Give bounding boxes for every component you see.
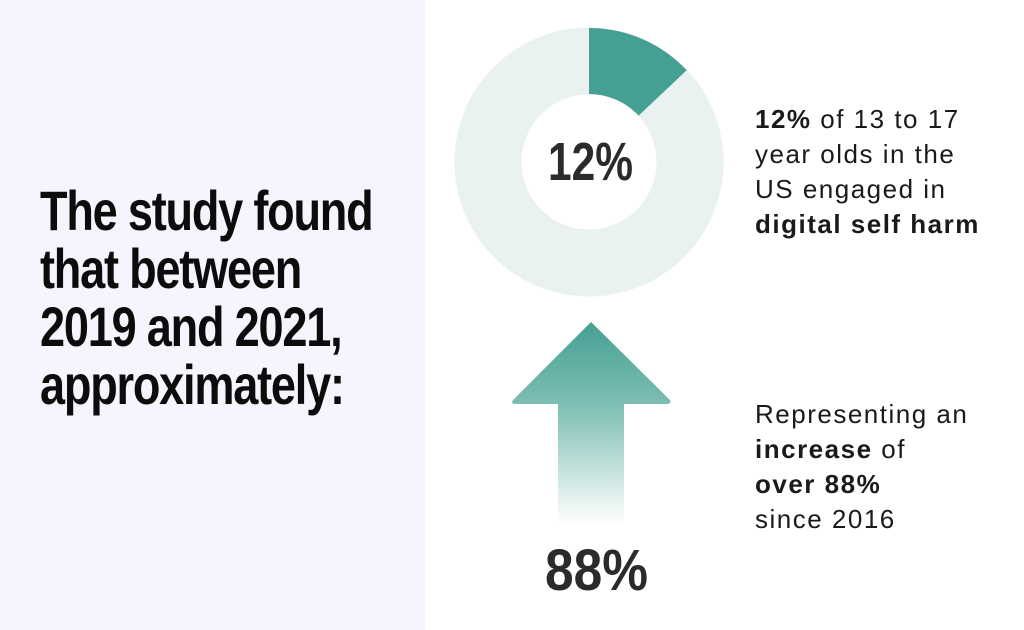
panel: left intro [0,0,425,630]
title: The study found [40,179,372,242]
text block: 12% stat: 12% of 13 to 17 [755,104,960,134]
text block: 12% stat: year olds in the [755,139,955,169]
text block: 12% stat: digital self harm [755,209,980,239]
text block: 88% stat [755,399,968,534]
donut label: 12% [548,132,633,192]
text block: 88% stat: over 88% [755,469,881,499]
text block: 12% stat: US engaged in [755,174,947,204]
text block: 88% stat: since 2016 [755,504,896,534]
title [40,179,372,416]
wedge 12% [589,28,687,116]
arrow label: 88% [545,538,648,603]
arrow icon [512,322,670,525]
title: that between [40,237,301,300]
title: 2019 and 2021, [40,295,341,358]
title: approximately: [40,353,344,416]
text block: 12% stat [755,104,980,239]
text block: 88% stat: Representing an [755,399,968,429]
text block: 88% stat: increase of [755,434,906,464]
